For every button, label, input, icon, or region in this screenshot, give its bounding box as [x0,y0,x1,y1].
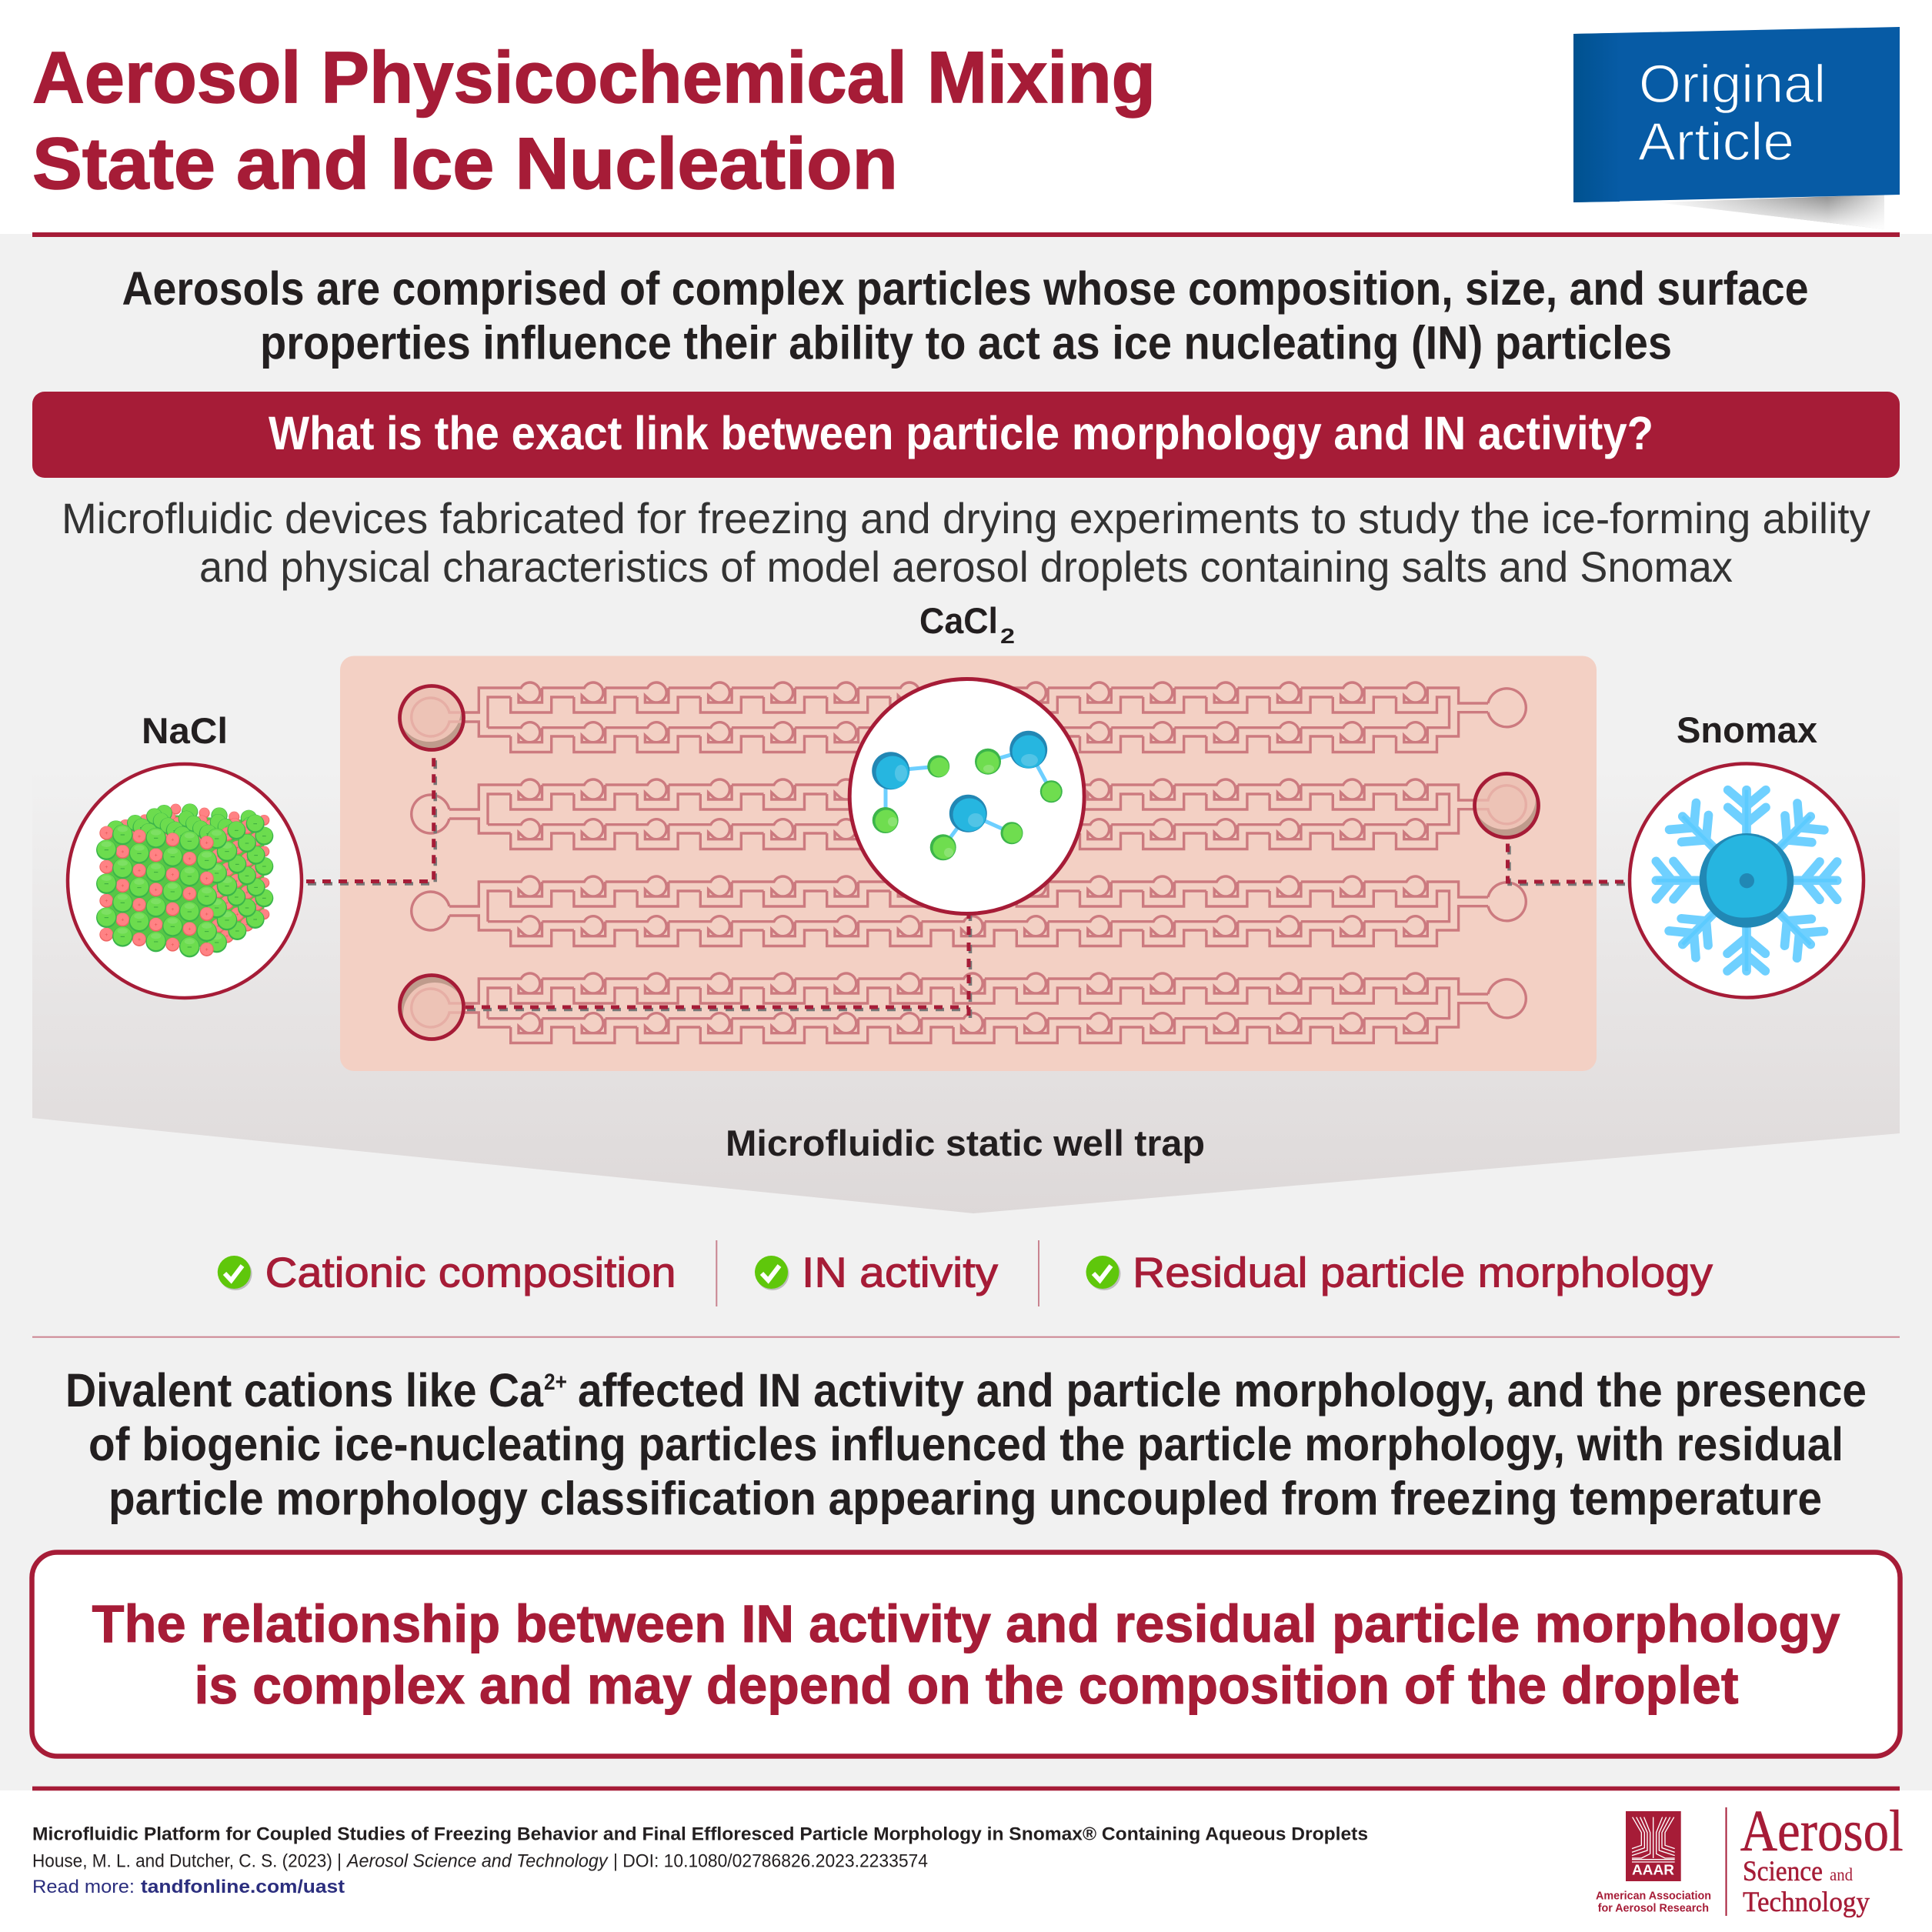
conclusion box [32,1553,1900,1756]
logo: Aerosol Science and Technology: Technology [1743,1887,1870,1918]
circle: CaCl2 molecules [849,679,1084,914]
molecule atoms [872,731,1063,860]
title: State and Ice Nucleation [32,123,898,205]
logo: AAAR: AAAR [1632,1863,1674,1878]
dashed connectors [306,755,1625,1018]
panel: microfluidic device [340,656,1597,1071]
circle: NaCl crystal [68,764,302,998]
findings text: 2+ [544,1370,567,1395]
logo mark lines [1632,1817,1675,1862]
citation block [32,1824,1368,1897]
logo: AAAR: for Aerosol Research [1598,1901,1709,1914]
check item: cationic composition: Cationic composition [265,1249,676,1296]
gradient arrow panel [32,758,1900,1213]
filled well: right [1473,766,1539,837]
findings text: Divalent cations like Ca [65,1364,544,1416]
findings text: of biogenic ice-nucleating particles influenced the particle morphology, with residual [88,1418,1844,1470]
conclusion box: The relationship between IN activity and residual particle morphology [92,1594,1840,1653]
label: microfluidic static well trap: Microfluidic static well trap [726,1123,1205,1163]
microfluidic channels [412,682,1526,1043]
methods description: Microfluidic devices fabricated for freezing and drying experiments to study the ice-forming ability [62,494,1870,542]
label: CaCl2: 2 [1000,624,1015,648]
conclusion box: is complex and may depend on the composition of the droplet [194,1656,1739,1715]
label: NaCl: NaCl [142,710,228,751]
citation block: Read more: [32,1877,135,1897]
badge: original article: Article [1638,112,1794,172]
methods description: and physical characteristics of model aerosol droplets containing salts and Snomax [199,542,1733,591]
findings text [65,1364,1867,1525]
logo: Aerosol Science and Technology: Science [1743,1856,1823,1887]
citation block: Aerosol Science and Technology [345,1851,609,1872]
methods description [62,494,1870,591]
logo: AAAR [1596,1811,1711,1914]
citation block: Microfluidic Platform for Coupled Studies of Freezing Behavior and Final Effloresced Particle Morphology in Snomax® Containing Aqueous Droplets [32,1824,1368,1845]
citation block: House, M. L. and Dutcher, C. S. (2023) | [32,1851,342,1872]
badge: original article: Original [1639,54,1826,114]
findings text: particle morphology classification appearing uncoupled from freezing temperature [108,1473,1822,1525]
checklist [218,1240,1713,1306]
findings text: affected IN activity and particle morphology, and the presence [578,1364,1867,1416]
logo: AAAR: American Association [1596,1889,1711,1902]
icon: snowflake with cell [1656,790,1837,971]
intro text: Aerosols are comprised of complex particles whose composition, size, and surface [122,262,1808,315]
intro text [122,262,1808,369]
label: CaCl2: CaCl [919,600,998,641]
badge: original article [1573,27,1900,229]
check item: IN activity: IN activity [802,1249,999,1296]
icon: NaCl lattice cube [96,803,273,957]
logo: Aerosol Science and Technology [1740,1799,1904,1918]
title [32,37,1156,205]
filled well: bottom left [400,976,466,1046]
intro text: properties influence their ability to act as ice nucleating (IN) particles [260,317,1672,369]
question banner [32,392,1900,478]
label: Snomax: Snomax [1677,709,1817,750]
circle: Snomax [1630,763,1864,997]
logo: Aerosol Science and Technology: Aerosol [1740,1799,1904,1864]
molecule bonds [886,749,1051,847]
citation block: | DOI: 10.1080/02786826.2023.2233574 [613,1851,928,1872]
title: Aerosol Physicochemical Mixing [32,37,1156,118]
citation block: tandfonline.com/uast [141,1877,345,1897]
filled well: top left [398,679,465,749]
check item: residual particle morphology: Residual particle morphology [1133,1249,1713,1296]
footer white band [0,1790,1932,1932]
question banner: What is the exact link between particle morphology and IN activity? [269,407,1653,459]
logo: Aerosol Science and Technology: and [1830,1865,1853,1884]
